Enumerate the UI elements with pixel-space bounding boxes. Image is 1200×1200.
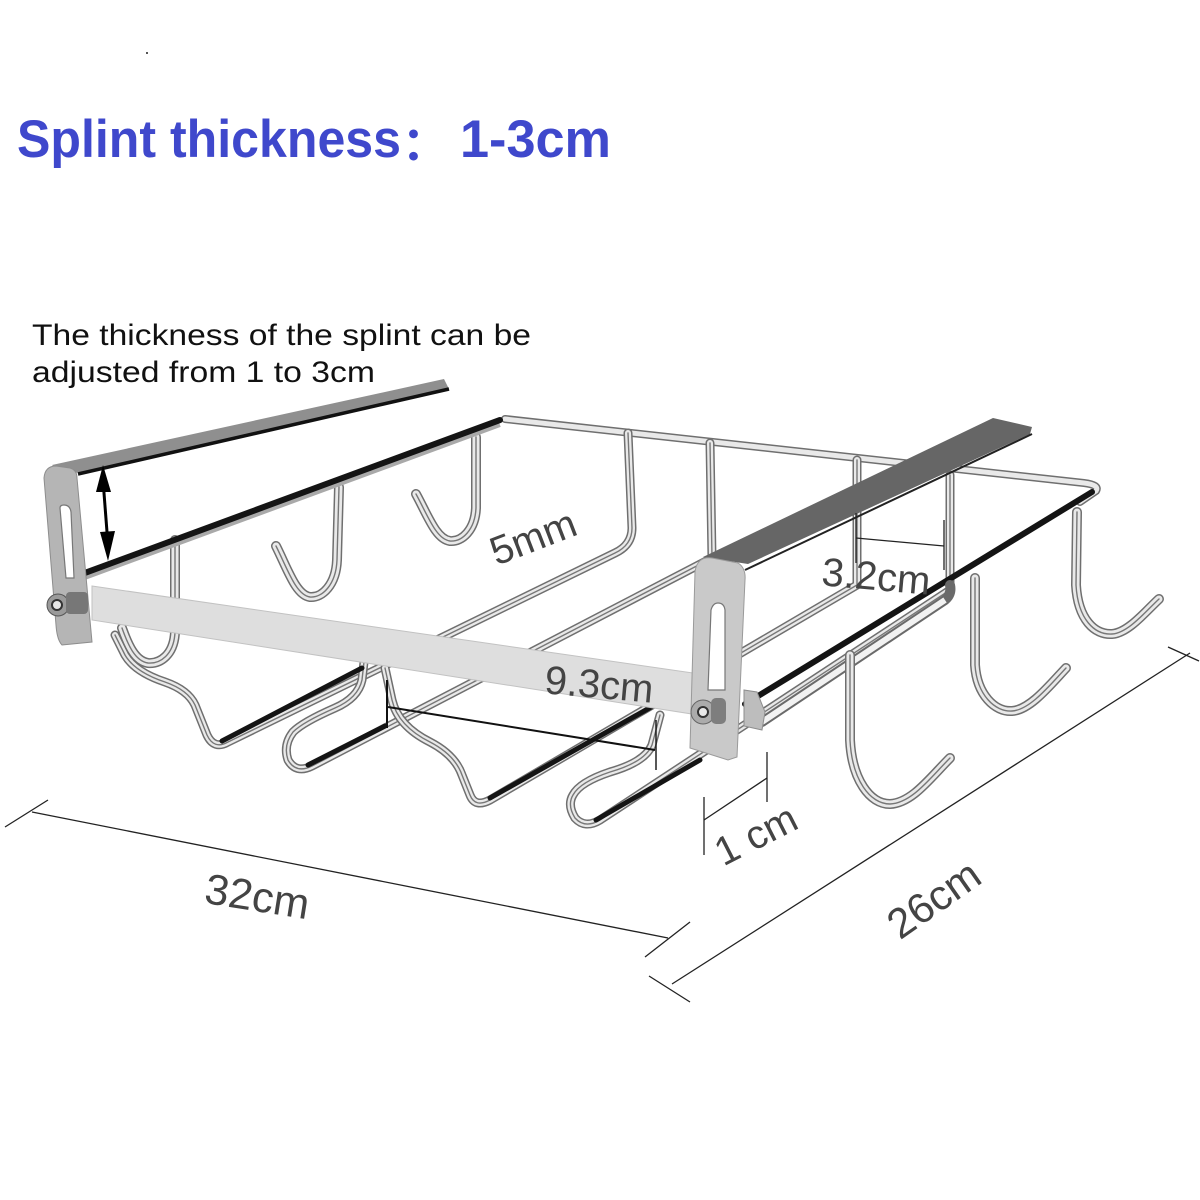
description text — [32, 319, 531, 389]
right bracket top strip — [703, 418, 1032, 564]
left hooks — [122, 437, 476, 663]
hanger wire 4 — [570, 475, 950, 824]
dimension: 26cm — [649, 647, 1199, 1002]
label: 9.3cm: 9.3cm — [543, 658, 655, 712]
front right rail dark — [745, 492, 1092, 704]
title: ： — [402, 118, 448, 170]
right hooks — [850, 512, 1159, 804]
description text: The thickness of the splint can be — [32, 319, 531, 352]
speck — [146, 52, 148, 54]
left bracket top strip — [52, 379, 449, 476]
title: 1-3cm — [460, 110, 611, 169]
label: 32cm: 32cm — [202, 865, 313, 929]
dimension: splint gap arrow — [96, 465, 115, 561]
right strip under edge — [745, 434, 1032, 570]
illustration: wire rack — [44, 379, 1159, 824]
title — [17, 110, 611, 170]
right parallel wire — [762, 585, 950, 722]
dimension: 3.2cm — [856, 513, 944, 570]
dimension: 32cm — [5, 800, 690, 957]
left strip under edge — [78, 389, 449, 474]
dimension: 9.3cm — [387, 680, 656, 770]
label: 5mm: 5mm — [484, 501, 583, 574]
description text: adjusted from 1 to 3cm — [32, 356, 375, 389]
rear rail — [505, 419, 1097, 502]
label: 1 cm: 1 cm — [707, 796, 805, 875]
dark wire runs — [222, 668, 700, 820]
hanger wire 1 — [115, 433, 632, 745]
label: 3.2cm: 3.2cm — [820, 550, 932, 604]
dimension: 1cm — [704, 752, 767, 855]
title: Splint thickness — [17, 110, 401, 169]
hanger wire 3 — [385, 460, 857, 803]
right bracket plate — [690, 558, 745, 760]
right bracket tab — [744, 690, 765, 730]
left rail — [82, 420, 500, 579]
hanger wire 2 — [286, 443, 712, 769]
crossbar plate — [92, 586, 700, 714]
label: 26cm: 26cm — [878, 850, 989, 948]
left bracket plate — [44, 466, 92, 645]
